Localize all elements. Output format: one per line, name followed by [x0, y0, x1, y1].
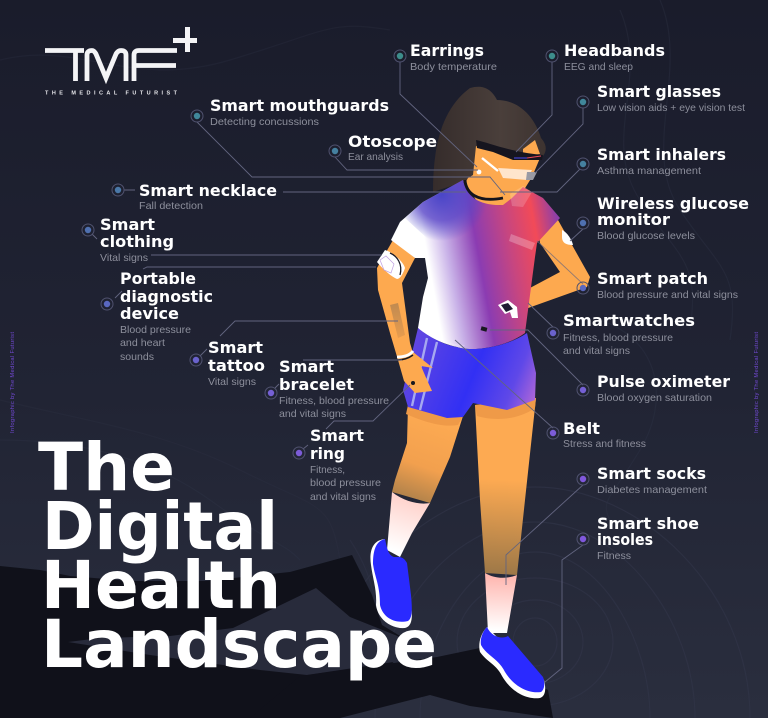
earring — [477, 170, 481, 174]
label: smart ring: Smart — [310, 426, 364, 445]
figure: woman wearing devices — [370, 87, 590, 698]
label: smart mouthguards — [210, 96, 389, 128]
logo — [45, 27, 197, 96]
label: smart necklace — [139, 181, 277, 212]
label: pulse oximeter: Blood oxygen saturation — [597, 392, 712, 404]
label: portable diagnostic device: sounds — [120, 351, 154, 363]
label: belt — [563, 419, 646, 450]
title — [38, 429, 437, 683]
label: otoscope: Otoscope — [348, 132, 437, 151]
label: portable diagnostic device — [120, 269, 213, 363]
label: smart glasses: Smart glasses — [597, 82, 721, 101]
label: smart glasses — [597, 82, 745, 114]
label: earrings — [410, 41, 497, 73]
label: belt: Stress and fitness — [563, 438, 646, 450]
label: smart shoe insoles: Fitness — [597, 550, 631, 562]
smart tattoo — [390, 303, 405, 338]
label: smart bracelet: bracelet — [279, 375, 354, 394]
label: headbands: Headbands — [564, 41, 665, 60]
label: smart tattoo: Vital signs — [208, 376, 256, 388]
label: smart bracelet: Fitness, blood pressure — [279, 395, 389, 407]
label: smartwatches: and vital signs — [563, 345, 630, 357]
label: smart necklace: Fall detection — [139, 200, 203, 212]
label: smartwatches — [563, 311, 695, 357]
label: smart necklace: Smart necklace — [139, 181, 277, 200]
left arm — [377, 240, 415, 360]
label: portable diagnostic device: and heart — [120, 337, 165, 349]
label: otoscope: Ear analysis — [348, 151, 403, 163]
smart patch — [509, 234, 535, 250]
label: smartwatches: Fitness, blood pressure — [563, 332, 673, 344]
label: headbands — [564, 41, 665, 73]
label: smart shoe insoles: insoles — [597, 530, 653, 549]
label: smart bracelet: Smart — [279, 357, 334, 376]
label: pulse oximeter — [597, 372, 730, 404]
shirt — [391, 180, 560, 349]
label: smart clothing — [100, 215, 174, 264]
shorts stripes — [412, 338, 437, 410]
label: earrings: Earrings — [410, 41, 484, 60]
front sock — [485, 573, 517, 633]
back leg — [392, 405, 463, 503]
label: pulse oximeter: Pulse oximeter — [597, 372, 730, 391]
label: smart patch: Smart patch — [597, 269, 708, 288]
ground shadow — [0, 555, 553, 718]
label: otoscope — [348, 132, 437, 163]
second ring — [481, 326, 487, 332]
belt — [427, 330, 465, 348]
label: smart socks: Diabetes management — [597, 484, 707, 496]
right arm — [473, 220, 590, 334]
label: headbands: EEG and sleep — [564, 61, 633, 73]
label: smart ring: blood pressure — [310, 477, 381, 489]
label: portable diagnostic device: device — [120, 304, 179, 323]
smart ring — [411, 381, 415, 385]
forehead — [523, 140, 540, 156]
smart bracelet — [397, 351, 413, 357]
label: smart mouthguards: Detecting concussions — [210, 116, 319, 128]
label: wireless glucose monitor: Wireless glucose — [597, 194, 749, 213]
front shoe — [479, 627, 545, 698]
thigh shadows — [406, 398, 536, 426]
label: smart patch — [597, 269, 738, 301]
label: wireless glucose monitor: monitor — [597, 210, 670, 229]
smartwatch — [498, 300, 518, 318]
back shoe — [370, 539, 412, 628]
ponytail and hair — [433, 87, 546, 192]
title: Landscape — [41, 606, 437, 683]
dot markers — [82, 50, 589, 545]
title: Health — [41, 547, 281, 624]
label: smart tattoo: tattoo — [208, 356, 265, 375]
label: smart ring: Fitness, — [310, 464, 345, 476]
shorts — [403, 328, 536, 418]
label: smart tattoo: Smart — [208, 338, 263, 357]
logo: THE MEDICAL FUTURIST — [45, 90, 178, 96]
smart necklace — [465, 180, 503, 199]
label: smart patch: Blood pressure and vital signs — [597, 289, 738, 301]
label: smart socks — [597, 464, 707, 496]
label: smart bracelet: and vital signs — [279, 408, 346, 420]
label: smart glasses: Low vision aids + eye vision test — [597, 102, 745, 114]
label: earrings: Body temperature — [410, 61, 497, 73]
label: portable diagnostic device: Blood pressure — [120, 324, 191, 336]
label: smart shoe insoles — [597, 514, 699, 562]
label: portable diagnostic device: diagnostic — [120, 287, 213, 306]
smart glasses — [498, 168, 532, 180]
side credit right: Infographic by The Medical Futurist — [754, 332, 760, 433]
label: smart shoe insoles: Smart shoe — [597, 514, 699, 533]
label: smart clothing: clothing — [100, 232, 174, 251]
label: smart bracelet — [279, 357, 389, 420]
side credit left: Infographic by The Medical Futurist — [10, 332, 16, 433]
front leg — [475, 398, 536, 575]
label: smart mouthguards: Smart mouthguards — [210, 96, 389, 115]
label: smart inhalers — [597, 145, 726, 177]
title: The — [38, 429, 175, 506]
label: smart inhalers: Smart inhalers — [597, 145, 726, 164]
hand on hip — [398, 352, 433, 393]
headband — [476, 140, 543, 160]
label: smart clothing: Smart — [100, 215, 155, 234]
label: belt: Belt — [563, 419, 600, 438]
label: wireless glucose monitor — [597, 194, 749, 242]
label: smartwatches: Smartwatches — [563, 311, 695, 330]
back sock — [387, 492, 430, 557]
label: portable diagnostic device: Portable — [120, 269, 196, 288]
connector lines — [92, 62, 583, 682]
label: wireless glucose monitor: Blood glucose levels — [597, 230, 695, 242]
title: Digital — [42, 488, 278, 565]
label: smart tattoo — [208, 338, 265, 388]
glucose monitor — [562, 230, 573, 245]
label: smart ring — [310, 426, 381, 503]
label: smart ring: ring — [310, 444, 345, 463]
shirt shade — [405, 180, 503, 250]
label: smart socks: Smart socks — [597, 464, 706, 483]
label: smart clothing: Vital signs — [100, 252, 148, 264]
label: smart inhalers: Asthma management — [597, 165, 701, 177]
smart clothing band — [377, 250, 405, 279]
smart inhaler — [510, 186, 532, 207]
label: smart ring: and vital signs — [310, 491, 376, 503]
neck and face — [465, 146, 540, 206]
